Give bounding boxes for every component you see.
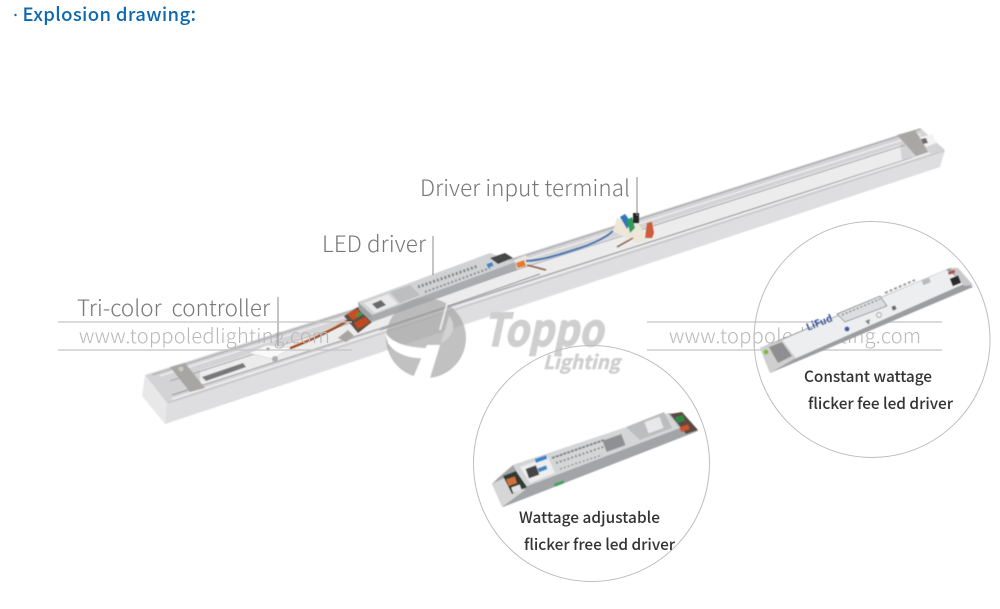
title: Explosion drawing: bbox=[22, 1, 196, 27]
mounting bracket left bbox=[170, 363, 205, 392]
dark slot left bbox=[202, 363, 246, 381]
top rail surface bbox=[145, 128, 945, 403]
driver input terminal block bbox=[613, 213, 654, 247]
tri-color controller module bbox=[249, 307, 372, 362]
callout lines bbox=[278, 177, 637, 346]
logo wordmark: Toppo bbox=[483, 294, 606, 359]
logo watermark: Lighting bbox=[543, 348, 623, 375]
circle callout: constant wattage driver bbox=[754, 222, 990, 458]
driver photo bbox=[760, 268, 973, 373]
caption: Wattage adjustable bbox=[519, 506, 660, 528]
blue input wire bbox=[526, 231, 613, 261]
linear light body bbox=[142, 128, 945, 424]
label: LED driver: LED driver bbox=[322, 227, 427, 259]
circle callout: wattage adjustable driver bbox=[474, 346, 710, 582]
left end face bbox=[142, 375, 167, 424]
rail lines bbox=[152, 129, 921, 375]
wires bbox=[290, 318, 352, 348]
logo mark bbox=[385, 298, 466, 378]
LED driver on bar bbox=[358, 253, 546, 330]
lens strip bbox=[200, 145, 902, 387]
wire connector bbox=[344, 307, 372, 333]
driver photo bbox=[492, 412, 698, 507]
watermark left: www.toppoledlighting.com bbox=[79, 320, 330, 349]
watermark right: www.toppoledlighting.com bbox=[669, 320, 921, 349]
label: tri-color controller: Tri-color controller bbox=[77, 291, 271, 323]
front side face bbox=[165, 150, 945, 424]
caption: Constant wattage bbox=[804, 365, 932, 387]
label: driver input terminal: Driver input terminal bbox=[420, 171, 630, 203]
logo watermark bbox=[385, 294, 623, 378]
circle callout: wattage adjustable driver: flicker free led driver bbox=[524, 533, 676, 555]
circle callout: constant wattage driver: flicker fee led driver bbox=[808, 392, 954, 414]
mounting bracket right bbox=[897, 130, 936, 156]
driver photo: LiFud bbox=[804, 310, 834, 334]
